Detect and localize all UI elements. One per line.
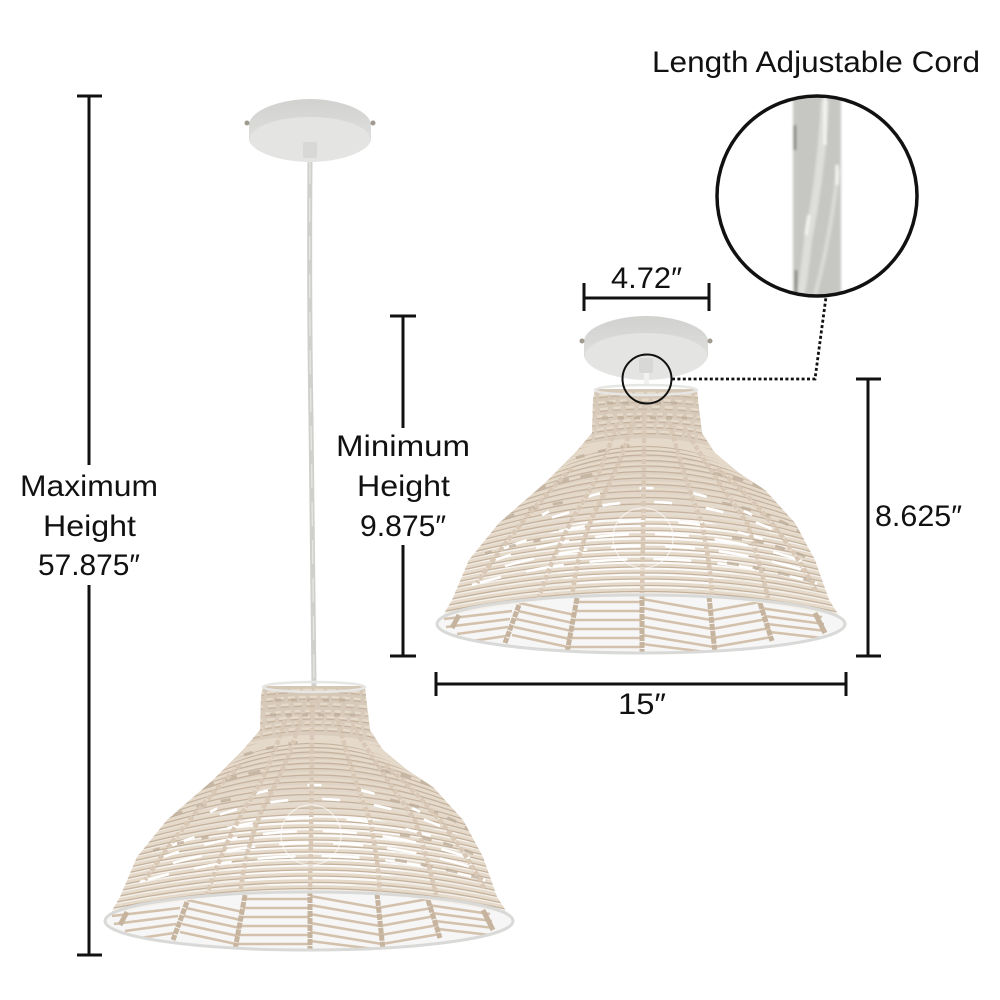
label: maximum height: 57.875″	[38, 549, 140, 582]
dimension: minimum height	[390, 316, 416, 656]
label: minimum height: 9.875″	[360, 510, 446, 543]
label: maximum height: Maximum	[20, 470, 158, 503]
callout: cord detail circle	[717, 85, 917, 307]
label: minimum height: Minimum	[336, 430, 470, 463]
label: shade width: 15″	[618, 688, 666, 721]
lamp shade: small lamp at minimum height	[432, 383, 852, 658]
label: minimum height	[336, 430, 470, 543]
label: shade height: 8.625″	[875, 500, 962, 533]
lamp shade: large lamp at maximum height	[100, 680, 520, 955]
label: minimum height: Height	[357, 470, 451, 503]
dimension: maximum height	[77, 96, 102, 955]
dimension: shade width	[436, 672, 846, 696]
label: maximum height	[20, 470, 158, 582]
label: canopy width: 4.72″	[611, 262, 682, 295]
dimension: shade height	[856, 379, 881, 656]
canopy: small lamp	[580, 316, 712, 386]
heading: length adjustable cord: Length Adjustable Cord	[652, 46, 980, 79]
label: maximum height: Height	[43, 510, 137, 543]
dimension: canopy width	[584, 283, 709, 311]
callout: small circle marking the cord	[622, 354, 672, 404]
dotted leader line	[672, 297, 826, 379]
cord: full length	[310, 160, 314, 686]
canopy: large lamp	[244, 99, 376, 162]
